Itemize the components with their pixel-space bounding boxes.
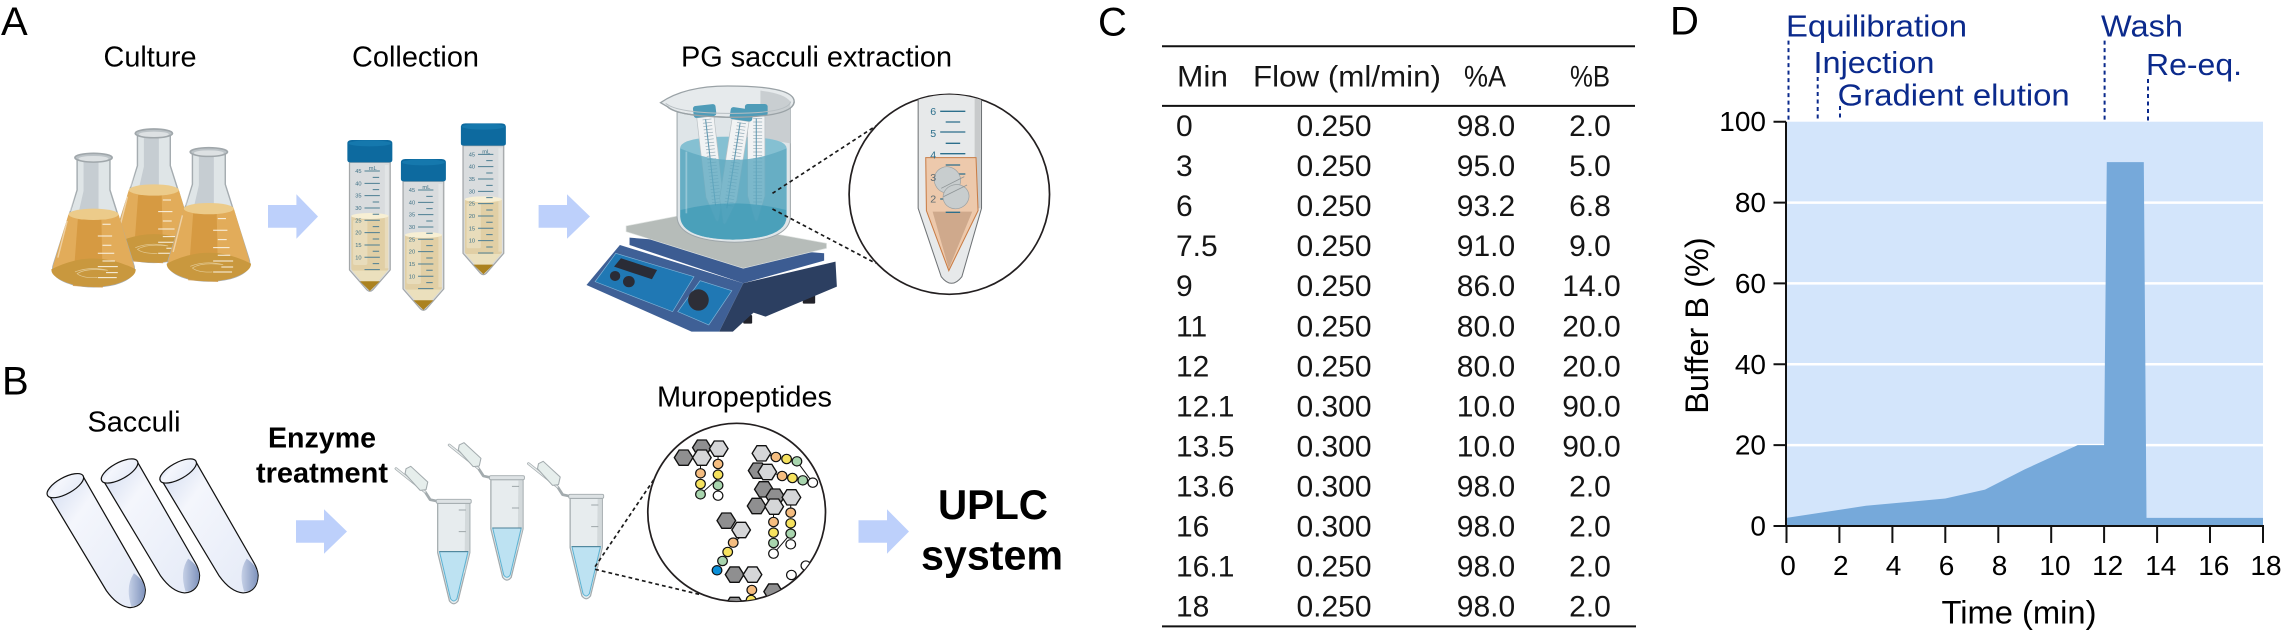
table rows: 6.8 bbox=[1569, 190, 1611, 223]
table rows: 0.300 bbox=[1296, 470, 1372, 504]
table rows: 91.0 bbox=[1457, 230, 1515, 263]
table rows: 16.1 bbox=[1176, 551, 1234, 584]
table rows: 80.0 bbox=[1457, 310, 1515, 343]
icon: centrifuge tubes: 45 bbox=[409, 188, 415, 194]
icon: culture flasks bbox=[51, 129, 251, 288]
arrow: culture to collection bbox=[268, 194, 318, 239]
icon: centrifuge tubes: 30 bbox=[469, 189, 475, 195]
icon: centrifuge tubes: 40 bbox=[355, 181, 362, 187]
icon: hot plate with beaker bbox=[586, 86, 837, 332]
arrow: collection to extraction bbox=[539, 194, 590, 239]
table rows: 10.0 bbox=[1457, 390, 1515, 423]
icon: centrifuge tubes: 10 bbox=[469, 239, 475, 245]
callout: magnified tube with sacculi: 3 bbox=[930, 172, 936, 184]
label: UPLC system: system bbox=[921, 531, 1063, 578]
table rows: 0.250 bbox=[1296, 551, 1372, 584]
icon: centrifuge tubes: 30 bbox=[355, 206, 362, 212]
x tick labels: 10 bbox=[2039, 550, 2071, 581]
table rows: 2.0 bbox=[1569, 591, 1611, 624]
arrow: to UPLC system bbox=[858, 509, 909, 554]
phase label: Gradient elution: Gradient elution bbox=[1838, 78, 2070, 112]
icon: centrifuge tubes: 25 bbox=[409, 237, 415, 243]
label: Enzyme treatment bbox=[256, 422, 388, 490]
chart: Buffer B gradient area chart bbox=[1679, 106, 2282, 630]
table rows: 80.0 bbox=[1457, 350, 1515, 383]
plot background bbox=[1786, 122, 2263, 526]
phase label: Wash: Wash bbox=[2101, 8, 2183, 44]
icon: centrifuge tubes: 25 bbox=[469, 202, 475, 208]
table rows: 2.0 bbox=[1569, 551, 1611, 584]
table header bbox=[1177, 60, 1610, 93]
icon: centrifuge tubes: 15 bbox=[355, 243, 362, 249]
y tick labels: 80 bbox=[1735, 187, 1766, 218]
table rows: 20.0 bbox=[1562, 350, 1621, 383]
icon: centrifuge tubes: 35 bbox=[469, 177, 475, 183]
icon: centrifuge tubes: 20 bbox=[355, 231, 362, 237]
table rows: 98.0 bbox=[1457, 551, 1515, 584]
x tick labels: 14 bbox=[2145, 550, 2176, 581]
callout: muropeptides magnified bbox=[595, 423, 826, 613]
heading: Culture: Culture bbox=[104, 42, 196, 74]
axes and ticks bbox=[1774, 122, 2264, 543]
icon: centrifuge tubes: 35 bbox=[355, 194, 362, 200]
panel label B: B bbox=[2, 360, 29, 404]
table rows: 2.0 bbox=[1569, 470, 1611, 504]
icon: centrifuge tubes: 35 bbox=[409, 213, 415, 219]
table rows: 0.250 bbox=[1296, 190, 1372, 223]
table rows: 16 bbox=[1176, 510, 1209, 544]
table rows: 6 bbox=[1176, 190, 1193, 223]
icon: microfuge tubes bbox=[396, 443, 604, 604]
table rows: 5.0 bbox=[1569, 150, 1611, 183]
icon: centrifuge tubes: 20 bbox=[409, 250, 415, 256]
table rows: 14.0 bbox=[1562, 270, 1621, 303]
table rows: 0.250 bbox=[1296, 350, 1372, 383]
icon: centrifuge tubes: mL bbox=[369, 166, 377, 172]
table rows: 90.0 bbox=[1562, 390, 1621, 423]
heading: Sacculi: Sacculi bbox=[88, 407, 180, 439]
icon: centrifuge tubes: 15 bbox=[409, 262, 415, 268]
table rows: 10.0 bbox=[1457, 430, 1515, 463]
table rows: 2.0 bbox=[1569, 510, 1611, 544]
panel label D: D bbox=[1670, 0, 1699, 44]
icon: centrifuge tubes: 30 bbox=[409, 225, 415, 231]
table rows: 0.250 bbox=[1296, 230, 1372, 263]
table header: %B bbox=[1570, 60, 1610, 93]
table rows: 0.300 bbox=[1296, 430, 1372, 463]
table rows: 2.0 bbox=[1569, 110, 1611, 143]
icon: centrifuge tubes: 45 bbox=[355, 169, 362, 175]
table rows: 12 bbox=[1176, 350, 1209, 383]
table rows: 0.300 bbox=[1296, 390, 1372, 423]
x tick labels: 2 bbox=[1833, 550, 1849, 581]
label: UPLC system bbox=[921, 481, 1063, 578]
table rows: 0 bbox=[1176, 110, 1193, 143]
icon: centrifuge tubes: 40 bbox=[409, 200, 415, 206]
table rows: 0.250 bbox=[1296, 270, 1372, 303]
heading: Muropeptides: Muropeptides bbox=[657, 382, 832, 414]
x tick labels: 6 bbox=[1939, 550, 1954, 581]
y tick labels: 60 bbox=[1735, 268, 1766, 299]
table rows: 98.0 bbox=[1457, 591, 1515, 624]
icon: centrifuge tubes: mL bbox=[482, 149, 490, 155]
table rows: 0.250 bbox=[1296, 591, 1372, 624]
callout: magnified tube with sacculi: 5 bbox=[930, 128, 936, 140]
icon: sacculi test tubes bbox=[43, 454, 258, 608]
callout: magnified tube with sacculi bbox=[772, 93, 1050, 294]
y tick labels: 20 bbox=[1735, 430, 1766, 461]
y tick labels: 0 bbox=[1750, 510, 1766, 542]
callout: magnified tube with sacculi: 6 bbox=[930, 106, 936, 118]
table rows: 11 bbox=[1176, 310, 1207, 343]
panel label A: A bbox=[1, 0, 28, 44]
x axis title: Time (min) bbox=[1942, 594, 2096, 630]
table rows: 18 bbox=[1176, 591, 1209, 624]
phase annotations bbox=[1786, 8, 2242, 121]
table rows: 98.0 bbox=[1457, 470, 1515, 504]
callout: magnified tube with sacculi: 2 bbox=[930, 194, 936, 206]
table rows: 3 bbox=[1176, 150, 1193, 183]
table header: Flow (ml/min) bbox=[1253, 60, 1441, 93]
table rows: 9.0 bbox=[1569, 230, 1611, 263]
x tick labels bbox=[1780, 550, 2282, 581]
table rows: 20.0 bbox=[1562, 310, 1621, 343]
table rows: 13.5 bbox=[1176, 430, 1234, 463]
table rows: 95.0 bbox=[1457, 150, 1515, 183]
arrow: enzyme treatment bbox=[296, 509, 347, 554]
label: Enzyme treatment: Enzyme bbox=[268, 422, 376, 454]
x tick labels: 4 bbox=[1886, 550, 1901, 581]
table rows: 0.250 bbox=[1296, 110, 1372, 143]
y axis title: Buffer B (%) bbox=[1679, 237, 1715, 414]
phase label: Re-eq.: Re-eq. bbox=[2146, 47, 2242, 82]
table rows: 98.0 bbox=[1457, 510, 1515, 544]
table: gradient program bbox=[1162, 46, 1636, 626]
area: gradient profile bbox=[1786, 162, 2263, 526]
table header: Min bbox=[1177, 60, 1228, 93]
x tick labels: 8 bbox=[1992, 550, 2007, 581]
table rows: 13.6 bbox=[1176, 470, 1234, 504]
y tick labels: 100 bbox=[1719, 106, 1766, 137]
x tick labels: 16 bbox=[2198, 550, 2229, 581]
table rows bbox=[1176, 110, 1621, 624]
table rows: 0.300 bbox=[1296, 510, 1372, 544]
icon: centrifuge tubes: 15 bbox=[469, 226, 475, 232]
table rows: 9 bbox=[1176, 270, 1193, 303]
icon: centrifuge tubes: 25 bbox=[355, 218, 362, 224]
x tick labels: 12 bbox=[2092, 550, 2123, 581]
phase label: Equilibration: Equilibration bbox=[1786, 8, 1967, 44]
label: Enzyme treatment: treatment bbox=[256, 458, 388, 490]
icon: centrifuge tubes: 45 bbox=[469, 152, 475, 158]
label: UPLC system: UPLC bbox=[938, 481, 1048, 528]
icon: centrifuge tubes: 40 bbox=[469, 165, 475, 171]
icon: centrifuge tubes: mL bbox=[422, 185, 430, 191]
table rows: 93.2 bbox=[1457, 190, 1515, 223]
table rows: 86.0 bbox=[1457, 270, 1515, 303]
table rows: 98.0 bbox=[1457, 110, 1515, 143]
y tick labels: 40 bbox=[1735, 349, 1766, 380]
icon: centrifuge tubes bbox=[347, 123, 506, 310]
table rows: 7.5 bbox=[1176, 230, 1218, 263]
table rows: 0.250 bbox=[1296, 310, 1372, 343]
heading: Collection: Collection bbox=[352, 42, 479, 74]
table header: %A bbox=[1464, 60, 1506, 93]
y tick labels bbox=[1719, 106, 1766, 541]
phase label: Injection: Injection bbox=[1814, 45, 1934, 80]
icon: centrifuge tubes: 10 bbox=[355, 255, 362, 261]
icon: centrifuge tubes: 10 bbox=[409, 274, 415, 280]
table rows: 90.0 bbox=[1562, 430, 1621, 463]
x tick labels: 0 bbox=[1780, 550, 1796, 581]
table rows: 12.1 bbox=[1176, 390, 1234, 423]
panel label C: C bbox=[1098, 0, 1127, 44]
heading: PG sacculi extraction: PG sacculi extraction bbox=[681, 42, 952, 74]
table rows: 0.250 bbox=[1296, 150, 1372, 183]
callout: magnified tube with sacculi: 4 bbox=[930, 150, 936, 162]
x tick labels: 18 bbox=[2250, 550, 2282, 581]
icon: centrifuge tubes: 20 bbox=[469, 214, 475, 220]
